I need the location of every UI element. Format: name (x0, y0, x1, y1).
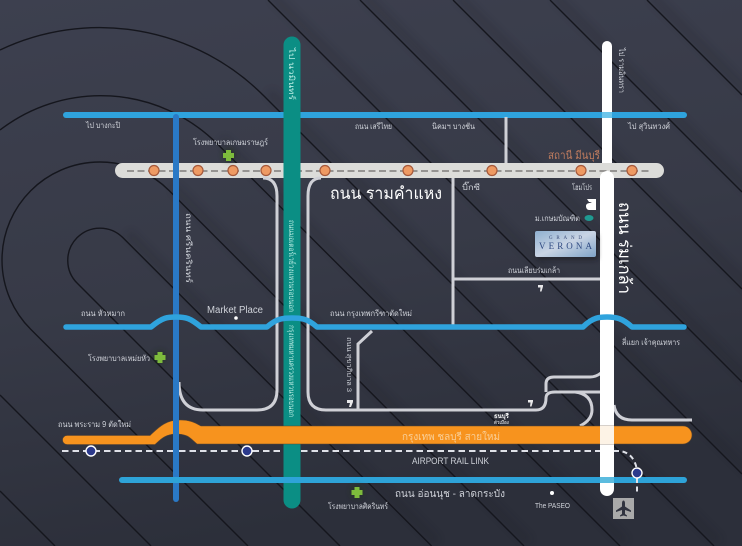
map labels: ถนน อ่อนนุช - ลาดกระบัง (395, 489, 505, 500)
map labels: โรงพยาบาลเหม่ยหัว (88, 353, 150, 363)
map labels: สถานี มีนบุรี (548, 149, 600, 162)
markers and dots (234, 285, 554, 495)
road: pale crossing on On Nut (600, 477, 614, 483)
map labels: ถนน กรุงเทพกรีฑาตัดใหม่ (330, 309, 412, 318)
road: white road over orange (600, 426, 614, 444)
logo: Grand Verona: VERONA (539, 241, 592, 251)
map labels: กรุงเทพ ชลบุรี สายใหม่ (402, 431, 500, 443)
map labels: ถนนเลียบร่มเกล้า (508, 266, 560, 275)
road: Rama 9 orange motorway (62, 420, 692, 444)
map labels: ถนน เสรีไทย (355, 122, 392, 131)
map labels: ธนบุรี (494, 412, 510, 420)
icon: airport (613, 498, 634, 519)
road: Krungthep Kreetha blue with overpasses (66, 317, 684, 327)
map labels: สี่แยก เจ้าคุณทหาร (622, 336, 681, 347)
map labels (58, 121, 681, 511)
road: motorway teal (284, 45, 300, 500)
road: Rom Klao white (600, 178, 614, 489)
road: Srinagarindra vertical blue (173, 117, 179, 499)
icon: hospital crosses (153, 148, 364, 499)
map labels: ม.เกษมบัณฑิต (535, 214, 580, 223)
rotated labels: ถนน ร่มเกล้า (615, 202, 634, 294)
map labels: ถนน พระราม 9 ตัดใหม่ (58, 420, 131, 429)
map labels: ไป สุวินทวงศ์ (627, 121, 670, 131)
rotated labels (184, 47, 634, 417)
map labels: Market Place (207, 305, 263, 316)
rotated labels: กรุงเทพมหานครวงแหวนรอบนอก (287, 325, 296, 417)
map labels: The PASEO (535, 501, 570, 510)
road: top blue road (66, 112, 684, 118)
map labels: นิคมฯ บางชัน (432, 122, 475, 131)
orange line dashed track and stations (127, 166, 652, 176)
rotated labels: ไป นวมินทร์ (287, 47, 297, 101)
icon: university (584, 215, 594, 221)
rotated labels: ไป รามอินทรา (617, 47, 626, 93)
rotated labels: ถนน สุขาภิบาล 3 (345, 337, 353, 392)
map labels: ตัวเมือง (494, 419, 509, 425)
map labels: ถนน รามคำแหง (330, 184, 442, 203)
road: thin white top section of Rom Klao (602, 46, 612, 163)
airport rail link (62, 446, 642, 492)
rotated labels: ถนน ศรีนครินทร์ (184, 213, 194, 284)
map labels: บิ๊กซี (462, 181, 481, 192)
map labels: โฮมโปร (572, 182, 592, 192)
map labels: ถนน หัวหมาก (81, 309, 125, 318)
map labels: AIRPORT RAIL LINK (412, 456, 489, 466)
road: pale crossing on top blue road (602, 112, 612, 118)
map labels: ไป บางกะปิ (85, 121, 120, 130)
logo: Grand Verona: GRAND (549, 236, 582, 241)
road: Ramkhamhaeng band (115, 163, 664, 178)
map labels: โรงพยาบาลเกษมราษฎร์ (193, 137, 269, 147)
map labels: โรงพยาบาลศิครินทร์ (328, 501, 389, 511)
logo: Grand Verona (535, 231, 598, 260)
road: On Nut blue (122, 477, 684, 483)
icon: shop (586, 199, 596, 210)
grey side roads (179, 117, 692, 426)
rotated labels: ถนนมอเตอร์เวย์วงแหวนรอบนอก (287, 220, 297, 312)
road: Srinagarindra crossing over orange (173, 418, 179, 456)
